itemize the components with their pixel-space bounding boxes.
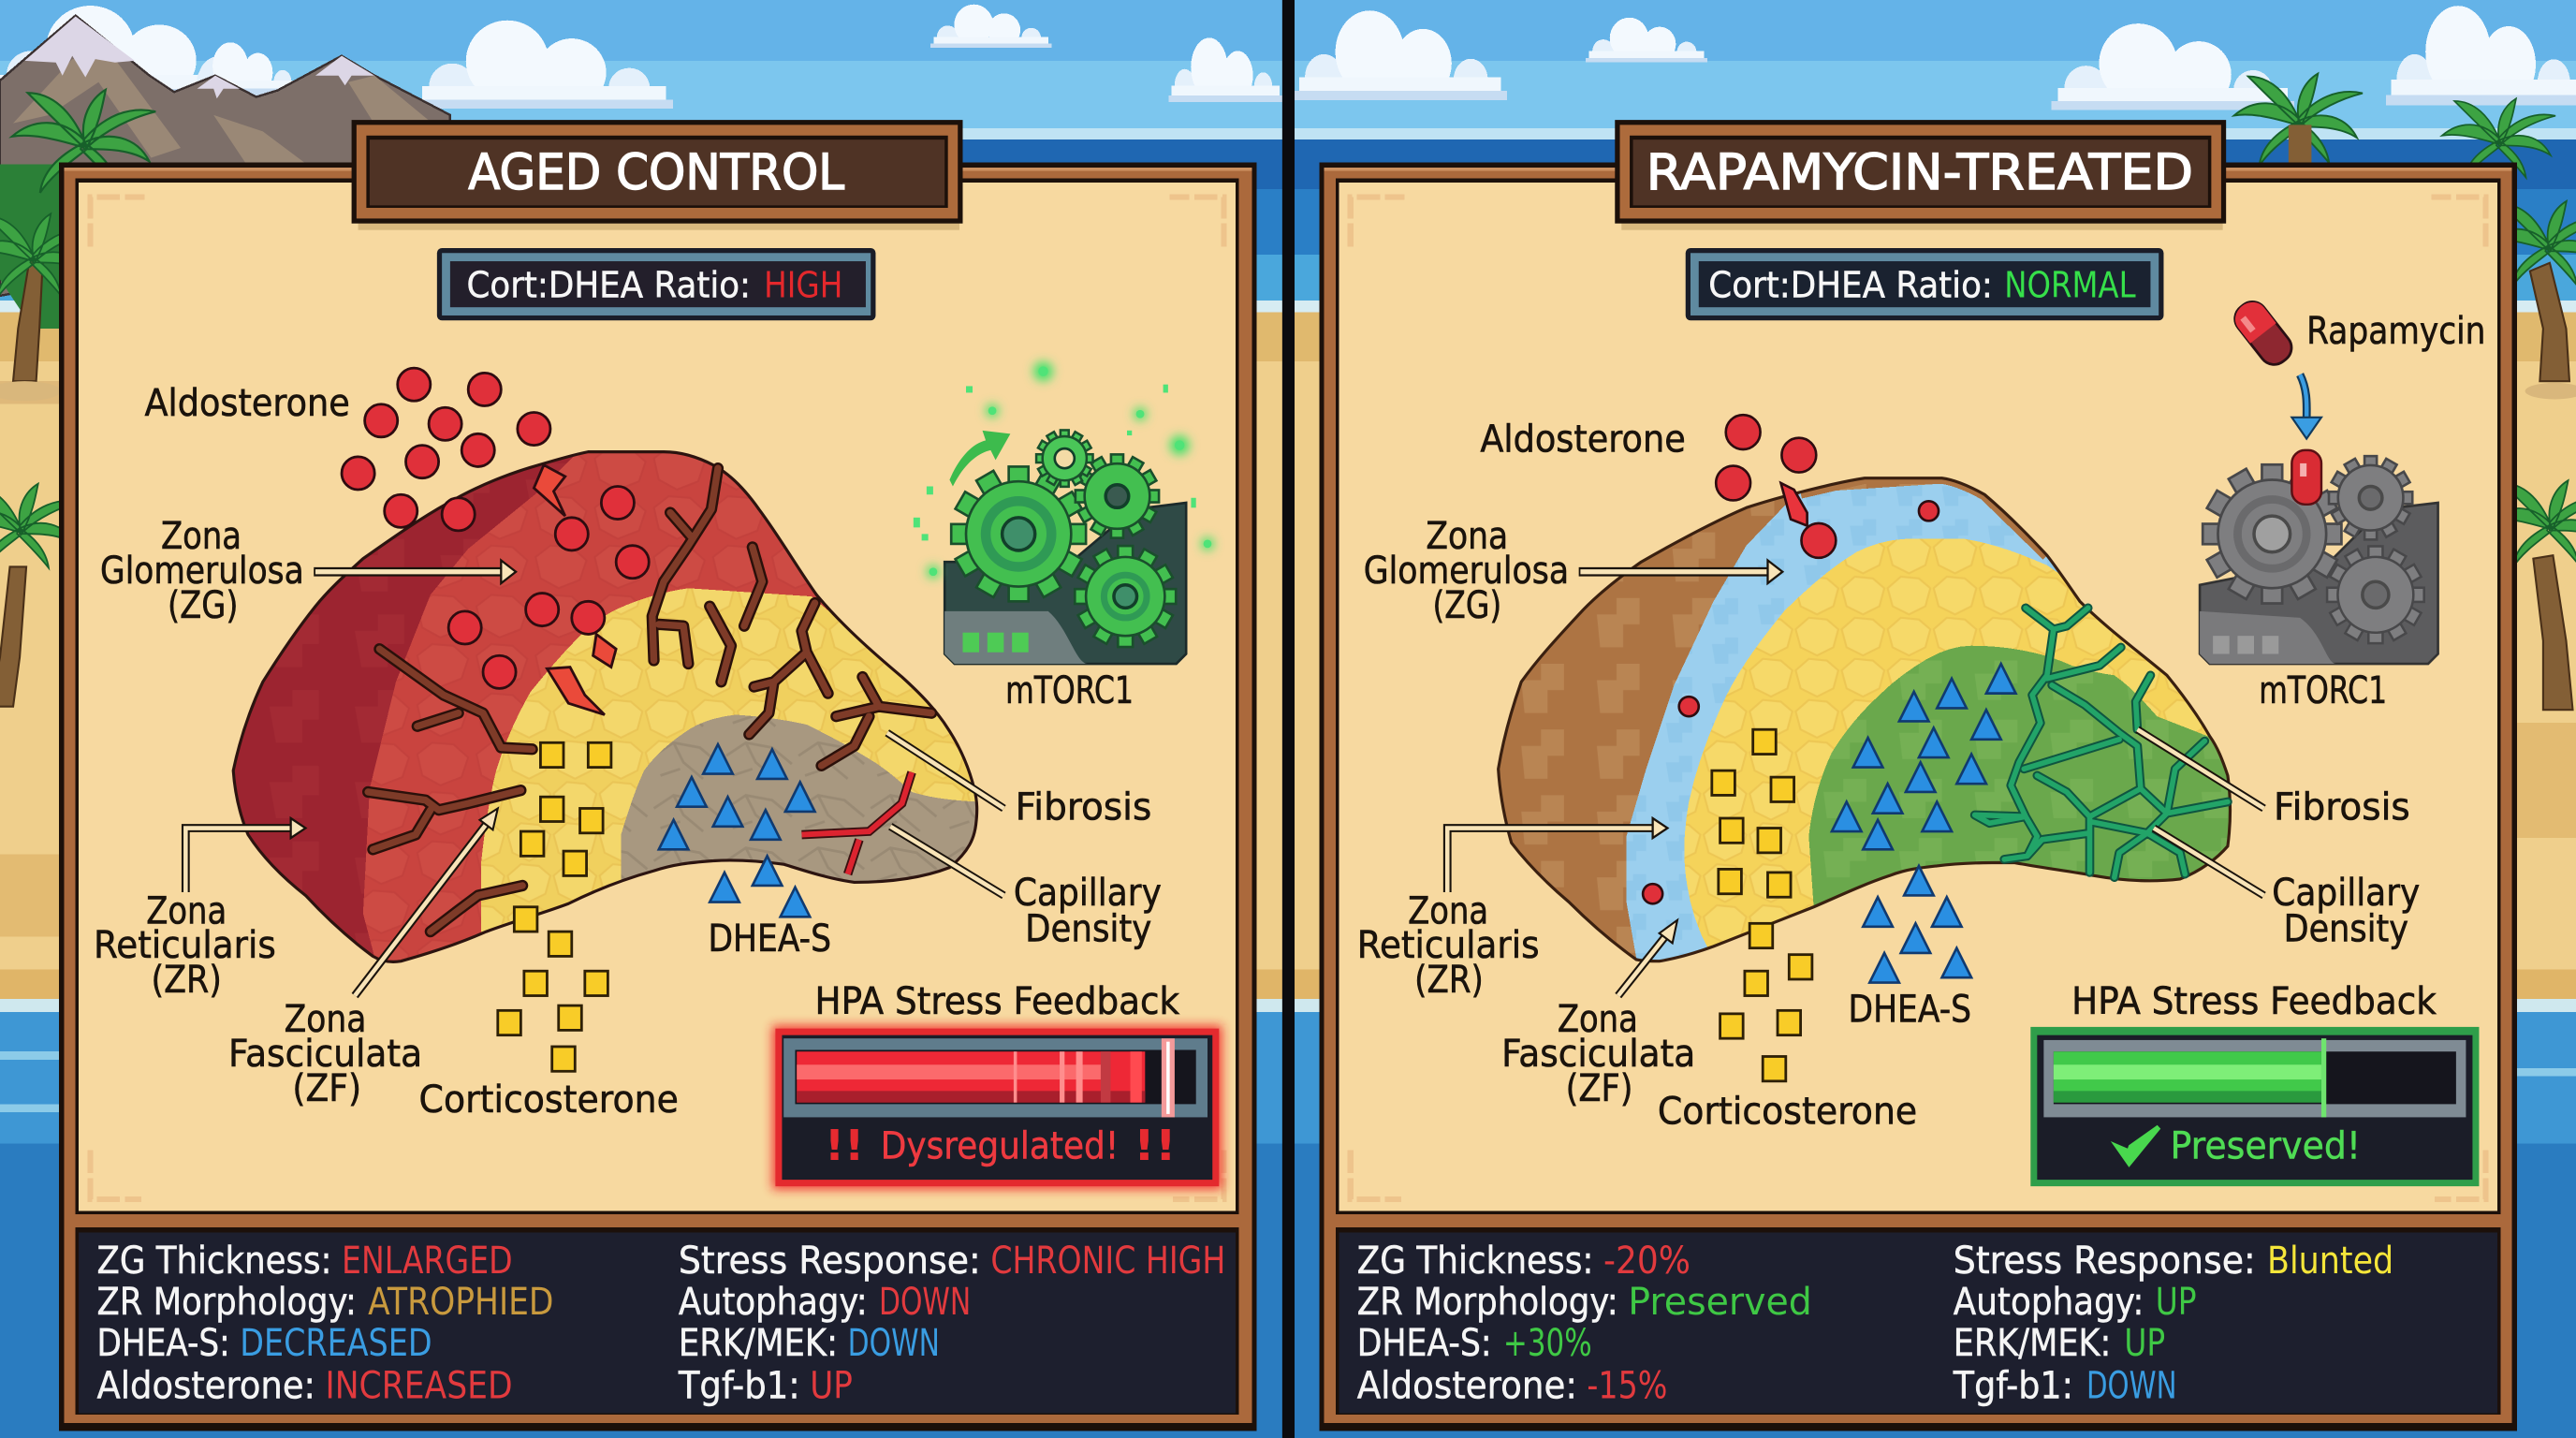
- label: DHEA-S: DHEA-S: [1848, 988, 1971, 1032]
- stats list: rapamycin-treated: UP: [2124, 1321, 2165, 1365]
- stats list: rapamycin-treated: [1357, 1239, 2393, 1408]
- arrow: zona fasciculata: [1618, 920, 1677, 996]
- center divider: [1282, 0, 1295, 1438]
- title plate: rapamycin-treated: RAPAMYCIN-TREATED: [1647, 144, 2193, 201]
- stats list: rapamycin-treated: Aldosterone:: [1357, 1364, 1577, 1408]
- corticosterone squares: rapamycin-treated: [1712, 729, 1812, 1081]
- callout: capillary density: Density: [1025, 907, 1151, 951]
- mTORC1 active gears: [914, 361, 1214, 664]
- ratio badge: aged control: [437, 248, 875, 320]
- stats list: rapamycin-treated: +30%: [1503, 1321, 1592, 1365]
- panel frame: aged control: [59, 163, 1257, 1431]
- title plate: rapamycin-treated: [1615, 120, 2226, 230]
- label: mTORC1: mTORC1: [2259, 668, 2387, 712]
- HPA gauge: dysregulated: Dysregulated!: [881, 1123, 1119, 1167]
- label: DHEA-S: DHEA-S: [708, 917, 831, 961]
- stats list: aged control: DOWN: [879, 1280, 971, 1324]
- clouds: [0, 5, 2576, 110]
- label: zona reticularis: Zona: [146, 888, 227, 932]
- label: zona glomerulosa: [100, 514, 304, 627]
- adrenal cross-section: aged control: [232, 450, 979, 963]
- HPA gauge: preserved: Preserved!: [2170, 1123, 2361, 1167]
- label: zona reticularis: Reticularis: [94, 923, 276, 967]
- HPA gauge: dysregulated: !!: [825, 1121, 864, 1170]
- corticosterone squares: aged control: [498, 742, 611, 1071]
- label: aldosterone: Aldosterone: [144, 381, 350, 425]
- HPA gauge: preserved: [2030, 1027, 2479, 1186]
- stats list: aged control: Stress Response:: [679, 1239, 981, 1283]
- stats list: aged control: DECREASED: [240, 1321, 432, 1365]
- stats list: rapamycin-treated: -20%: [1603, 1239, 1690, 1283]
- arrow: rapamycin to mTORC1: [2291, 374, 2321, 439]
- callout: capillary density: Capillary: [1014, 871, 1162, 915]
- aldosterone molecules: aged control: [342, 368, 649, 714]
- arrow: zona reticularis: [1447, 818, 1667, 892]
- stats list: rapamycin-treated: DOWN: [2086, 1364, 2177, 1408]
- stats list: aged control: DOWN: [848, 1321, 940, 1365]
- stats list: rapamycin-treated: ZR Morphology:: [1357, 1280, 1618, 1324]
- label: zona fasciculata: (ZF): [292, 1066, 361, 1110]
- label: mTORC1: mTORC1: [1005, 668, 1134, 712]
- mTORC1 inhibited gears: [2200, 450, 2438, 664]
- callout: fibrosis: Fibrosis: [1016, 785, 1151, 829]
- ratio badge: rapamycin-treated: NORMAL: [2004, 265, 2136, 307]
- label: zona reticularis: Zona: [1408, 888, 1488, 932]
- stats list: rapamycin-treated: ZG Thickness:: [1357, 1239, 1593, 1283]
- label: zona glomerulosa: Glomerulosa: [1364, 549, 1569, 593]
- stats list: aged control: Autophagy:: [679, 1280, 868, 1324]
- label: zona fasciculata: Fasciculata: [1501, 1032, 1695, 1076]
- label: HPA stress feedback: HPA Stress Feedback: [2071, 979, 2437, 1023]
- callout: capillary density: [890, 827, 1162, 951]
- label: zona glomerulosa: (ZG): [168, 583, 238, 627]
- callout: fibrosis: [2137, 729, 2410, 829]
- panel: aged control: [59, 120, 1257, 1431]
- label: zona reticularis: (ZR): [1414, 958, 1484, 1002]
- stats list: rapamycin-treated: -15%: [1587, 1364, 1667, 1408]
- title plate: aged control: AGED CONTROL: [468, 144, 845, 201]
- label: zona glomerulosa: [1364, 514, 1569, 627]
- label: zona fasciculata: Fasciculata: [228, 1032, 422, 1076]
- stats list: aged control: [97, 1239, 1225, 1408]
- stats list: rapamycin-treated: Tgf-b1:: [1953, 1364, 2073, 1408]
- arrow: zona glomerulosa: [1579, 560, 1782, 583]
- panel: rapamycin-treated: [1319, 120, 2517, 1431]
- label: zona reticularis: (ZR): [151, 958, 222, 1002]
- icon: rapamycin capsule: [2229, 296, 2297, 371]
- ratio badge: aged control: HIGH: [764, 265, 842, 307]
- stats list: rapamycin-treated: Autophagy:: [1954, 1280, 2144, 1324]
- label: HPA stress feedback: HPA Stress Feedback: [815, 979, 1180, 1023]
- stats list: aged control: ERK/MEK:: [679, 1321, 838, 1365]
- stats list: rapamycin-treated: ERK/MEK:: [1954, 1321, 2111, 1365]
- label: zona reticularis: Reticularis: [1357, 923, 1540, 967]
- callout: capillary density: Density: [2284, 907, 2408, 951]
- title plate: aged control: [352, 120, 962, 230]
- HPA gauge: dysregulated: !!: [1134, 1121, 1177, 1170]
- label: zona fasciculata: (ZF): [1566, 1066, 1633, 1110]
- stats list: rapamycin-treated: Preserved: [1628, 1280, 1812, 1324]
- stats list: aged control: DHEA-S:: [97, 1321, 230, 1365]
- arrow: zona fasciculata: [355, 808, 498, 996]
- stats list: rapamycin-treated: DHEA-S:: [1357, 1321, 1492, 1365]
- label: zona fasciculata: Zona: [285, 997, 366, 1041]
- ratio badge: aged control: Cort:DHEA Ratio:: [466, 265, 751, 307]
- stats list: rapamycin-treated: Stress Response:: [1954, 1239, 2256, 1283]
- stats list: rapamycin-treated: UP: [2156, 1280, 2197, 1324]
- stats list: aged control: ZR Morphology:: [97, 1280, 357, 1324]
- callout: capillary density: [2154, 829, 2420, 951]
- arrow: zona reticularis: [185, 818, 305, 892]
- label: zona reticularis: [94, 888, 276, 1002]
- label: zona fasciculata: [1501, 997, 1695, 1110]
- label: zona fasciculata: Zona: [1558, 997, 1638, 1041]
- aldosterone molecules: rapamycin-treated: [1643, 415, 1939, 903]
- label: corticosterone: Corticosterone: [1658, 1089, 1917, 1133]
- stats list: aged control: CHRONIC HIGH: [990, 1239, 1225, 1283]
- panel frame: rapamycin-treated: [1319, 163, 2517, 1431]
- stats list: aged control: ZG Thickness:: [97, 1239, 332, 1283]
- stats list: aged control: UP: [810, 1364, 853, 1408]
- label: zona glomerulosa: Glomerulosa: [100, 549, 304, 593]
- label: zona glomerulosa: Zona: [161, 514, 242, 558]
- stats list: aged control: ENLARGED: [342, 1239, 513, 1283]
- palm trees: [0, 74, 2576, 710]
- stats list: aged control: Aldosterone:: [97, 1364, 315, 1408]
- label: zona glomerulosa: (ZG): [1432, 583, 1501, 627]
- DHEA-S triangles: rapamycin-treated: [1832, 664, 2016, 983]
- label: corticosterone: Corticosterone: [419, 1078, 679, 1122]
- callout: fibrosis: Fibrosis: [2274, 785, 2410, 829]
- arrow: zona glomerulosa: [314, 560, 516, 583]
- label: rapamycin: Rapamycin: [2306, 309, 2485, 353]
- ratio badge: rapamycin-treated: Cort:DHEA Ratio:: [1708, 265, 1993, 307]
- ratio badge: rapamycin-treated: [1686, 248, 2163, 320]
- callout: capillary density: Capillary: [2272, 871, 2420, 915]
- adrenal cross-section: rapamycin-treated: [1497, 477, 2232, 962]
- callout: fibrosis: [887, 733, 1151, 829]
- DHEA-S triangles: aged control: [659, 744, 815, 917]
- label: zona fasciculata: [228, 997, 422, 1110]
- label: aldosterone: Aldosterone: [1480, 418, 1686, 462]
- mountains: [0, 16, 460, 296]
- label: zona reticularis: [1357, 888, 1540, 1002]
- HPA gauge: dysregulated: [772, 1025, 1222, 1190]
- stats list: aged control: ATROPHIED: [368, 1280, 553, 1324]
- stats list: aged control: INCREASED: [326, 1364, 513, 1408]
- stats list: aged control: Tgf-b1:: [678, 1364, 800, 1408]
- label: zona glomerulosa: Zona: [1426, 514, 1508, 558]
- stats list: rapamycin-treated: Blunted: [2267, 1239, 2393, 1283]
